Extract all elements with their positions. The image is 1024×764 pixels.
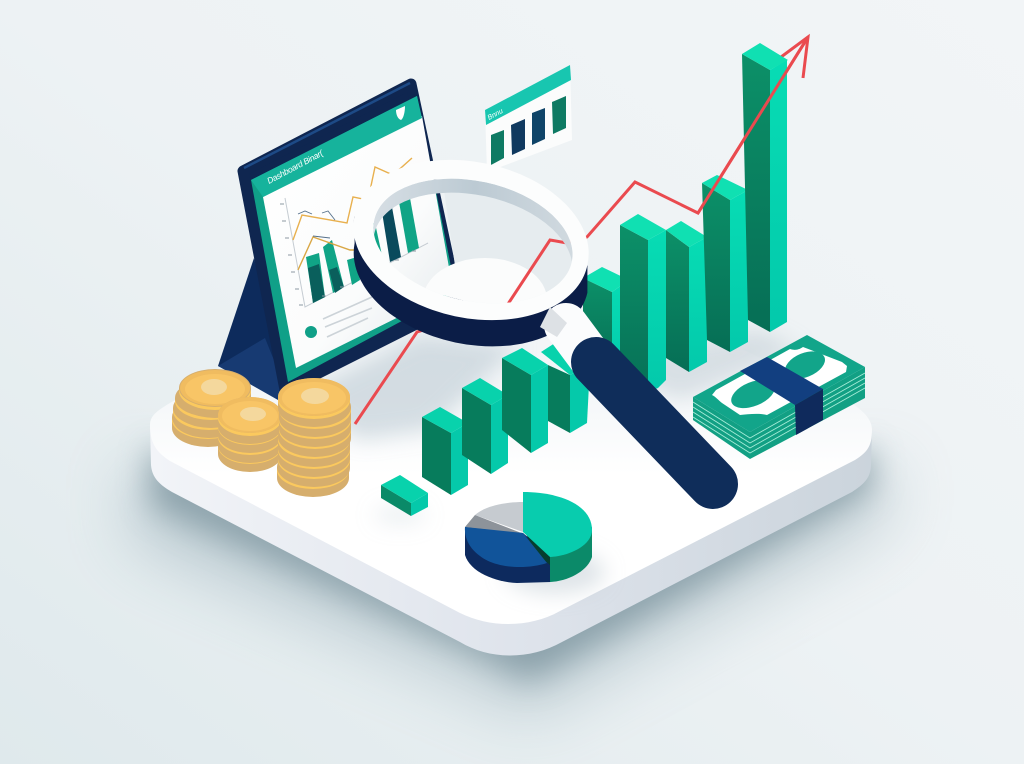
card title: Bnnu: [487, 108, 504, 122]
platform ambient shadow: [130, 460, 890, 715]
bill white area: [712, 347, 847, 415]
band side: [795, 389, 823, 435]
chart axes: [285, 198, 428, 307]
bar 4: [666, 221, 707, 372]
shield icon: [396, 106, 405, 120]
bar A: [422, 407, 468, 495]
pie green side: [550, 527, 592, 582]
arrow head: [777, 37, 808, 78]
card bars: [491, 96, 566, 165]
cash top face: [693, 335, 865, 432]
rim white ring: [353, 160, 589, 320]
bar 2: [583, 267, 629, 385]
tablet screen border: [251, 96, 456, 382]
soft shadows on platform: [300, 330, 800, 594]
platform slab: [150, 230, 872, 656]
lens inner rim: [374, 178, 572, 261]
rising bars front row: [381, 343, 590, 516]
grey connector: [540, 307, 567, 337]
pie teal slice: [523, 492, 592, 557]
axis ticks: [280, 204, 416, 305]
collar: [566, 325, 592, 360]
tablet frame highlight: [244, 83, 410, 168]
pie blue slice: [465, 527, 547, 567]
card header: [485, 65, 571, 125]
tablet legend dot: [305, 326, 317, 338]
red trend line with arrow: [355, 37, 808, 424]
block: [381, 475, 428, 516]
pie chart: [465, 492, 592, 583]
platform top surface: [150, 230, 872, 624]
tablet stand: [218, 258, 290, 400]
cash left face: [693, 397, 750, 459]
pie navy side: [465, 527, 551, 583]
pie dark cut: [525, 532, 550, 565]
bill ovals: [727, 346, 829, 414]
coin stacks: [172, 369, 351, 497]
pie light grey slice: [475, 502, 523, 532]
magnifying glass: [340, 150, 713, 484]
tablet frame: [243, 84, 458, 390]
cash stack: [693, 335, 865, 459]
bar 3: [620, 214, 666, 405]
tablet title: Dashboard Binar(: [265, 147, 326, 186]
tablet header: [251, 96, 422, 197]
rim dark band: [354, 215, 587, 346]
tablet text lines: [323, 297, 372, 337]
coin stack middle: [218, 397, 282, 472]
bar 5: [702, 175, 748, 352]
trend line over bars: [698, 37, 808, 213]
tablet line charts: [293, 158, 412, 270]
cash right face: [750, 367, 865, 459]
cash page lines: [693, 373, 865, 453]
lens red line: [508, 240, 567, 304]
band top: [740, 357, 823, 405]
lens mound: [426, 258, 546, 304]
bar C: [502, 348, 548, 453]
coin stack back left: [172, 369, 251, 447]
lens background: [453, 195, 571, 303]
lens view: [374, 178, 572, 303]
handle: [596, 362, 713, 484]
bar B: [462, 378, 508, 474]
pie dark grey slice: [465, 515, 524, 534]
coin stack front: [277, 378, 351, 497]
tablet screen content: [263, 116, 453, 368]
platform shadow: [150, 445, 872, 682]
bar D: [541, 343, 590, 433]
tablet dashboard: [243, 83, 458, 390]
tablet bars: [306, 198, 419, 303]
floating bar chart card: [485, 65, 572, 172]
bar 6 tall: [742, 43, 788, 332]
rising bars back row: [583, 37, 808, 405]
